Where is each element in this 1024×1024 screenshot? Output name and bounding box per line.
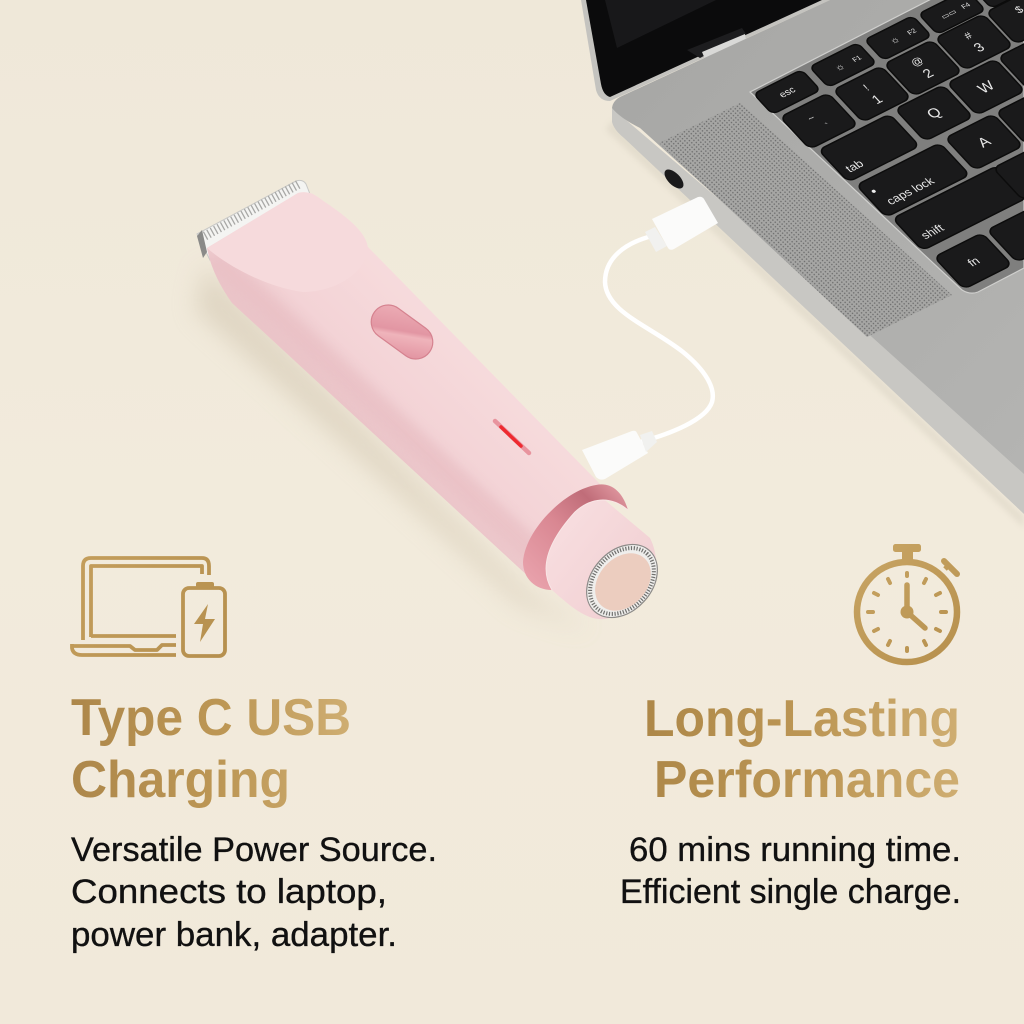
- keyboard: @: [908, 55, 927, 69]
- keyboard: F2: [906, 28, 918, 37]
- text: performance description: 60 mins running time.: [629, 831, 961, 869]
- heading: long-lasting performance: Performance: [654, 751, 960, 809]
- trimmer shadow: [195, 265, 590, 630]
- keyboard: F4: [960, 2, 972, 11]
- keyboard: ☼: [832, 61, 848, 74]
- shaver head: [545, 496, 656, 619]
- keyboard: W: [974, 78, 999, 97]
- laptop screen: [581, 0, 830, 101]
- keyboard: 3: [970, 39, 988, 55]
- metal ring: [523, 484, 628, 590]
- keyboard: shift: [918, 221, 947, 242]
- text: charging description: power bank, adapter.: [71, 916, 397, 954]
- charging cable: [582, 197, 718, 480]
- heading: type c usb charging: [71, 689, 351, 809]
- usb port: [661, 166, 687, 192]
- led indicator: [495, 421, 529, 453]
- heading: type c usb charging: Charging: [71, 751, 290, 809]
- text: performance description: [620, 831, 961, 911]
- laptop base side: [612, 108, 1024, 514]
- keyboard: F1: [851, 55, 863, 64]
- keyboard: caps lock: [883, 175, 937, 207]
- trimmer body: [207, 192, 600, 585]
- keyboard: esc: [777, 85, 798, 100]
- speaker grille: [659, 103, 952, 337]
- usb plug at trimmer: [582, 431, 657, 480]
- laptop shadow: [606, 120, 1024, 528]
- keyboard: fn: [964, 254, 983, 269]
- keyboard: ▭▭: [939, 7, 959, 21]
- shaver face: [572, 530, 672, 632]
- head scoop: [207, 192, 368, 292]
- body lower facet: [230, 266, 532, 552]
- laptop: [581, 0, 1024, 528]
- keyboard: #: [962, 30, 976, 42]
- heading: type c usb charging: Type C USB: [71, 689, 351, 747]
- keyboard: !: [861, 83, 872, 93]
- keyboard: tab: [842, 157, 867, 175]
- keyboard: [750, 0, 1024, 293]
- keyboard: `: [824, 121, 834, 131]
- text: performance description: Efficient single charge.: [620, 873, 961, 911]
- icon: laptop and battery: [72, 558, 225, 656]
- keyboard: ☼: [887, 34, 903, 47]
- laptop deck: [612, 0, 1024, 474]
- blade: [197, 180, 310, 260]
- power button: [365, 298, 439, 366]
- keyboard: 2: [919, 65, 937, 81]
- text: charging description: Connects to laptop,: [71, 873, 387, 911]
- keyboard: ~: [805, 113, 818, 124]
- cable wire: [605, 236, 713, 442]
- text: charging description: [71, 831, 437, 954]
- icon: stopwatch: [857, 544, 957, 662]
- heading: long-lasting performance: Long-Lasting: [644, 690, 960, 748]
- usb plug at laptop: [645, 197, 718, 252]
- heading: long-lasting performance: [644, 690, 960, 809]
- keyboard: 1: [868, 91, 886, 107]
- keyboard: A: [974, 134, 995, 151]
- trimmer: [195, 180, 672, 632]
- text: charging description: Versatile Power Source.: [71, 831, 437, 869]
- keyboard: Q: [923, 105, 945, 122]
